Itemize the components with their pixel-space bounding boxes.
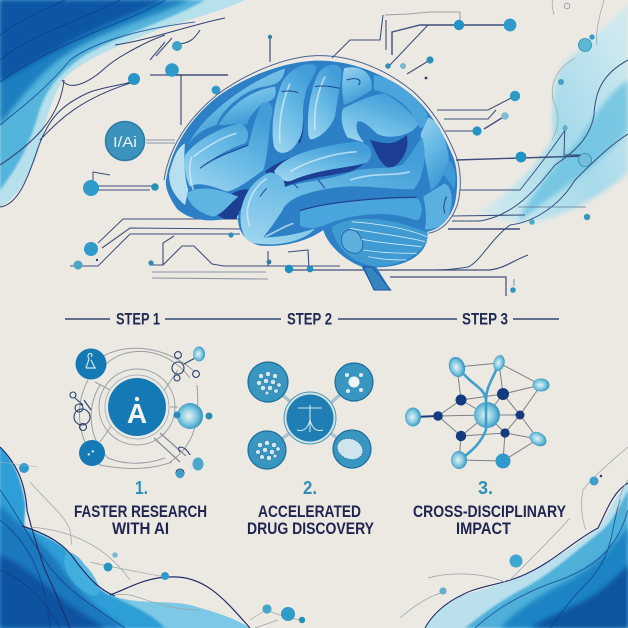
central node xyxy=(474,402,500,428)
heading: accelerated drug discovery: ACCELERATED xyxy=(258,502,361,521)
icon: step 1 AI network: A xyxy=(127,398,147,429)
gyri highlights xyxy=(190,77,410,237)
heading: accelerated drug discovery: DRUG DISCOVERY xyxy=(247,519,375,538)
dark nodes xyxy=(433,388,524,441)
circuit lines xyxy=(70,12,585,296)
heading: accelerated drug discovery xyxy=(247,502,375,538)
icon: step 2 drug discovery xyxy=(248,362,373,469)
heading: faster research with AI: WITH AI xyxy=(112,519,169,538)
gyrus: right lobes xyxy=(423,183,452,229)
gyrus: parietal band xyxy=(274,142,372,181)
large A circle xyxy=(105,375,169,439)
step 3 label: STEP 3 xyxy=(462,310,508,328)
gyrus: upper frontal xyxy=(188,68,285,145)
small icon circles xyxy=(76,348,106,380)
gyrus: far left lobe xyxy=(169,143,188,205)
heading: cross-disciplinary impact xyxy=(413,502,567,538)
number 2: 2. xyxy=(303,478,317,498)
center circle xyxy=(284,392,336,444)
sample circle top right xyxy=(335,363,373,401)
sample circle top left xyxy=(248,362,288,402)
step timeline xyxy=(65,310,559,328)
timeline line segments xyxy=(65,318,559,320)
wave: bottom right xyxy=(400,447,628,628)
wave: top right wash xyxy=(428,0,628,270)
dark sulcus pockets xyxy=(216,107,407,237)
icon: step 1 AI network xyxy=(70,346,212,478)
illustration: brain xyxy=(164,56,460,290)
heading: cross-disciplinary impact: CROSS-DISCIPLINARY xyxy=(413,502,567,521)
heading: faster research with AI: FASTER RESEARCH xyxy=(74,502,207,521)
brain silhouette xyxy=(166,61,457,290)
number 1: 1. xyxy=(135,478,148,498)
sulci xyxy=(200,79,447,213)
gyrus: long wrap band xyxy=(240,137,425,244)
wave: bottom left xyxy=(0,447,250,628)
sample circle bottom right xyxy=(333,430,371,468)
step 2 label: STEP 2 xyxy=(287,310,332,328)
brain stem xyxy=(363,267,391,290)
heading: faster research with AI xyxy=(74,502,207,538)
gyrus: frontal left xyxy=(184,102,272,192)
step 1 label: STEP 1 xyxy=(116,310,160,328)
icon: AI badge: I/Ai xyxy=(113,134,137,151)
heading: cross-disciplinary impact: IMPACT xyxy=(456,519,512,538)
dots and connectors: lower left xyxy=(0,462,305,628)
gyrus: temporal xyxy=(300,197,422,228)
cerebellum xyxy=(332,219,428,267)
molecule clusters xyxy=(70,352,199,477)
circuit nodes xyxy=(74,19,595,293)
wave: top left xyxy=(0,0,245,207)
brain outer contour xyxy=(164,56,460,233)
number 3: 3. xyxy=(478,478,493,498)
light nodes xyxy=(447,355,467,379)
sample circle bottom left xyxy=(248,431,286,469)
icon: AI badge xyxy=(106,122,144,160)
gyrus: top right cluster xyxy=(342,67,372,105)
icon: step 3 molecular network xyxy=(405,354,550,469)
gyrus: central columns xyxy=(273,64,317,153)
